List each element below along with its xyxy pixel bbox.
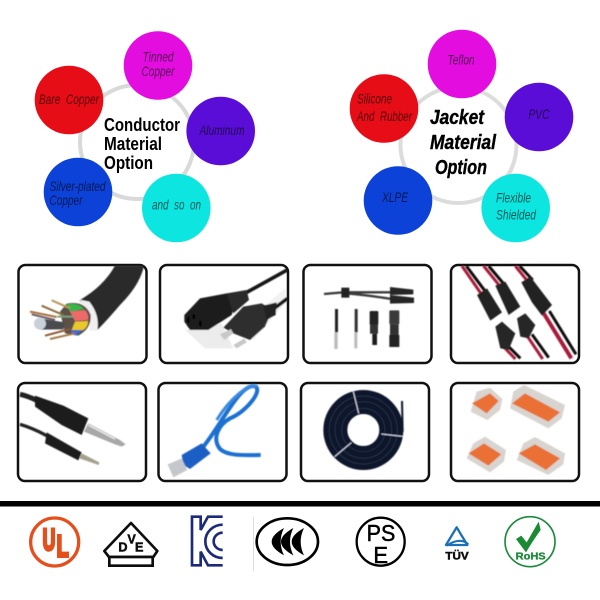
icon: branch connector and parts [324, 287, 414, 349]
panel: wire connectors [451, 265, 579, 363]
logo: PSE: PS [367, 520, 395, 546]
option: aluminum: Aluminum [199, 122, 245, 138]
option: flexible shielded: Flexible [496, 190, 531, 206]
option: tinned copper [124, 31, 192, 100]
icon: blue network cable [168, 386, 261, 477]
ring: jacket [400, 87, 516, 203]
panel: ethernet cable [158, 383, 286, 481]
logo: VDE [104, 523, 157, 566]
heading: jacket material option: Jacket [430, 107, 485, 129]
option: teflon [428, 30, 496, 98]
panel: solar connectors [304, 265, 432, 363]
logo: VDE: V [127, 533, 136, 547]
panel: multi-core cable [18, 265, 146, 363]
diagram: jacket material options [350, 30, 573, 242]
icon: power cord and plug [184, 270, 288, 348]
heading: conductor material option [104, 114, 180, 173]
logo: VDE: E [135, 541, 143, 555]
logo: VDE: D [118, 541, 127, 555]
heading: conductor material option: Material [104, 133, 162, 154]
logo: RoHS: RoHS [516, 552, 546, 563]
icon: audio jack plugs [20, 394, 126, 465]
icon: orange lever terminal blocks [467, 385, 565, 475]
panel: black cable coil [301, 383, 429, 481]
option: aluminum [186, 97, 255, 165]
logo: RoHS [505, 517, 555, 567]
logo: TUV: TÜV [445, 550, 469, 563]
option: tinned copper: Tinned [142, 48, 174, 64]
logo: KC [192, 517, 223, 565]
option: flexible shielded: Shielded [496, 206, 537, 222]
divider bar [0, 501, 600, 506]
option: silver-plated copper: Silver-plated [50, 178, 106, 194]
heading: jacket material option: Material [430, 132, 496, 154]
logo: PSE [357, 518, 405, 568]
icon: red and black wire plugs [462, 266, 576, 359]
icon: cable coil [329, 392, 403, 464]
option: bare copper: Bare Copper [39, 91, 100, 107]
panel: audio cables [18, 383, 146, 481]
heading: conductor material option: Conductor [104, 114, 180, 135]
logo: UL: U [43, 523, 55, 557]
option: xlpe [364, 166, 432, 235]
option: pvc [505, 83, 573, 151]
option: silver-plated copper: Copper [50, 192, 83, 208]
heading: conductor material option: Option [104, 152, 153, 173]
option: and so on [142, 174, 211, 242]
option: teflon: Teflon [448, 52, 475, 68]
option: tinned copper: Copper [142, 63, 175, 79]
logo: UL: L [57, 529, 69, 563]
heading: jacket material option [430, 107, 496, 179]
option: pvc: PVC [528, 106, 550, 122]
panel: power cord [160, 265, 288, 363]
icon: stripped cable [30, 266, 144, 339]
logo: UL [31, 518, 79, 566]
logo: CCC [257, 518, 318, 565]
ring: conductor [80, 85, 194, 199]
panel: lever connectors [451, 383, 579, 481]
option: flexible shielded [481, 174, 550, 242]
option: xlpe: XLPE [381, 189, 408, 205]
option: bare copper [35, 66, 103, 134]
logo: PSE: E [373, 542, 388, 568]
heading: jacket material option: Option [435, 157, 487, 179]
option: and so on: and so on [152, 196, 201, 212]
option: silicone and rubber: And Rubber [356, 108, 413, 124]
option: silicone and rubber: Silicone [357, 90, 392, 106]
option: silver-plated copper [44, 158, 112, 226]
diagram: conductor material options [35, 31, 255, 242]
option: silicone and rubber [350, 74, 418, 143]
separator line [253, 517, 254, 571]
logo: TUV [445, 527, 469, 563]
